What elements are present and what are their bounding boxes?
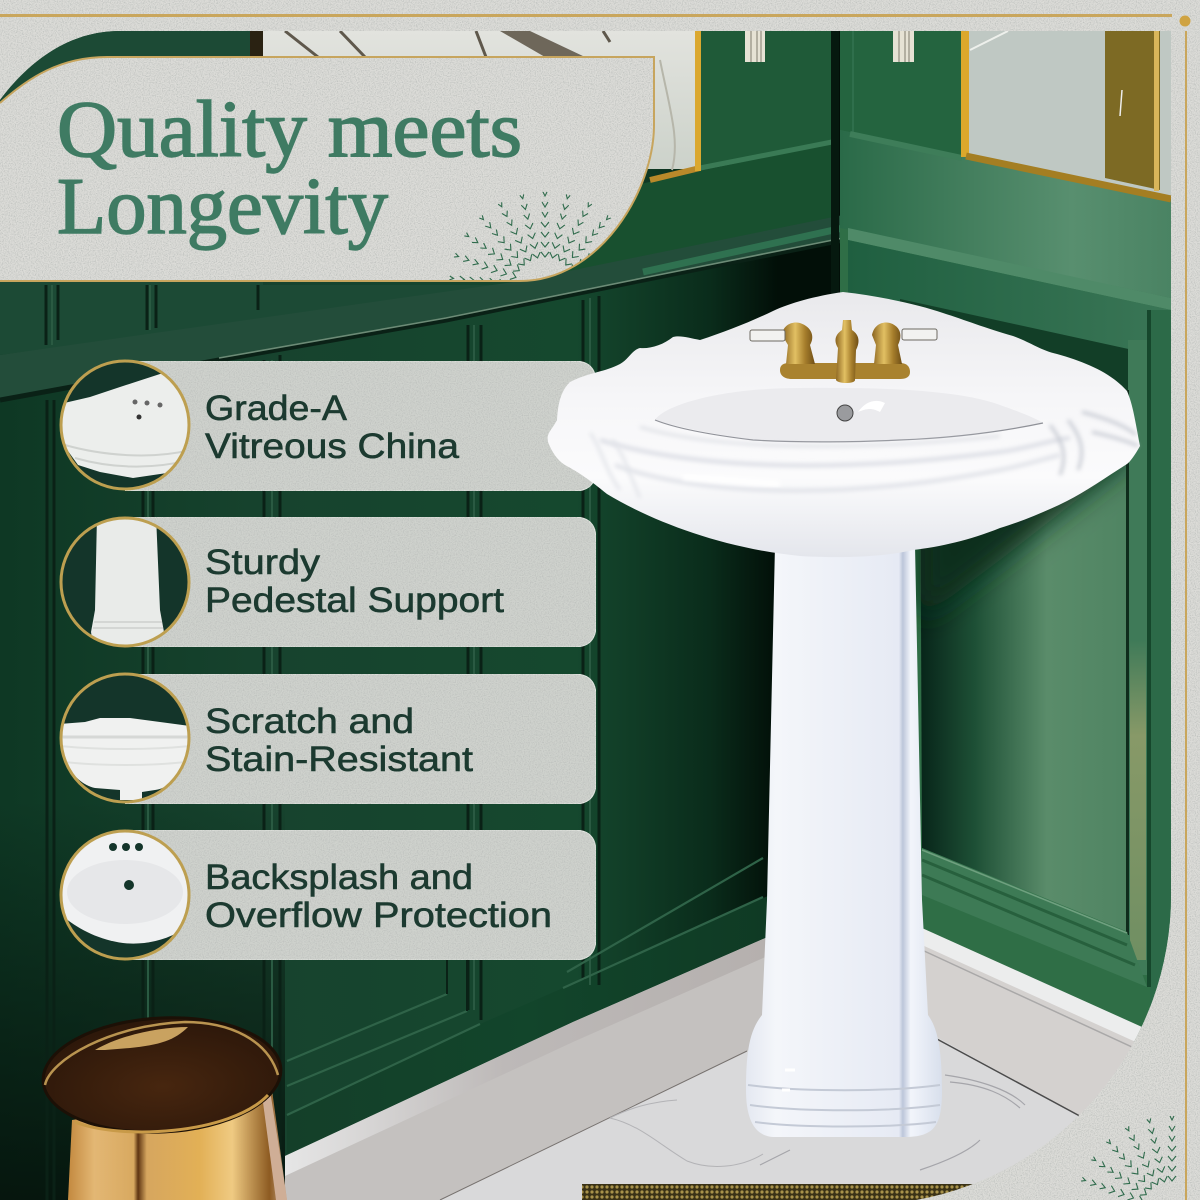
label <box>205 702 473 779</box>
thumbnail: sink rim <box>60 361 195 489</box>
wall moldings <box>46 285 599 1200</box>
label: Stain-Resistant <box>205 740 473 779</box>
label <box>205 858 552 935</box>
leaf ornament <box>449 192 611 280</box>
right wall <box>840 31 1171 1060</box>
label <box>205 543 504 620</box>
feature 4: Backsplash and Overflow Protection <box>60 830 596 960</box>
label <box>205 389 460 466</box>
title: Longevity <box>57 163 388 251</box>
chair rail <box>0 215 843 400</box>
label: Backsplash and <box>205 858 473 897</box>
feature 1: Grade-A Vitreous China <box>60 361 596 491</box>
label: Pedestal Support <box>205 581 504 620</box>
label: Scratch and <box>205 702 414 741</box>
gold waste bin <box>40 1012 287 1200</box>
rug <box>582 1184 987 1200</box>
sink basin <box>548 292 1140 557</box>
label: Overflow Protection <box>205 896 552 935</box>
wall sconces <box>745 31 914 62</box>
thumbnail: basin top <box>60 830 190 960</box>
label: Vitreous China <box>205 427 460 466</box>
label: Grade-A <box>205 389 348 428</box>
mirrors and marble <box>250 31 1171 199</box>
feature 2: Sturdy Pedestal Support <box>61 515 596 650</box>
leaf ornament: bottom right <box>1076 1116 1176 1200</box>
title <box>57 86 522 251</box>
brass faucet <box>750 320 937 383</box>
pedestal <box>746 545 942 1137</box>
title: Quality meets <box>57 86 522 174</box>
marble floor <box>440 1036 1090 1200</box>
left wall <box>0 31 845 1200</box>
thumbnail: sink front <box>60 674 190 804</box>
baseboard <box>285 928 1171 1200</box>
label: Sturdy <box>205 543 321 582</box>
feature 3: Scratch and Stain-Resistant <box>60 674 596 804</box>
header panel <box>0 57 654 289</box>
thumbnail: pedestal <box>91 520 188 644</box>
